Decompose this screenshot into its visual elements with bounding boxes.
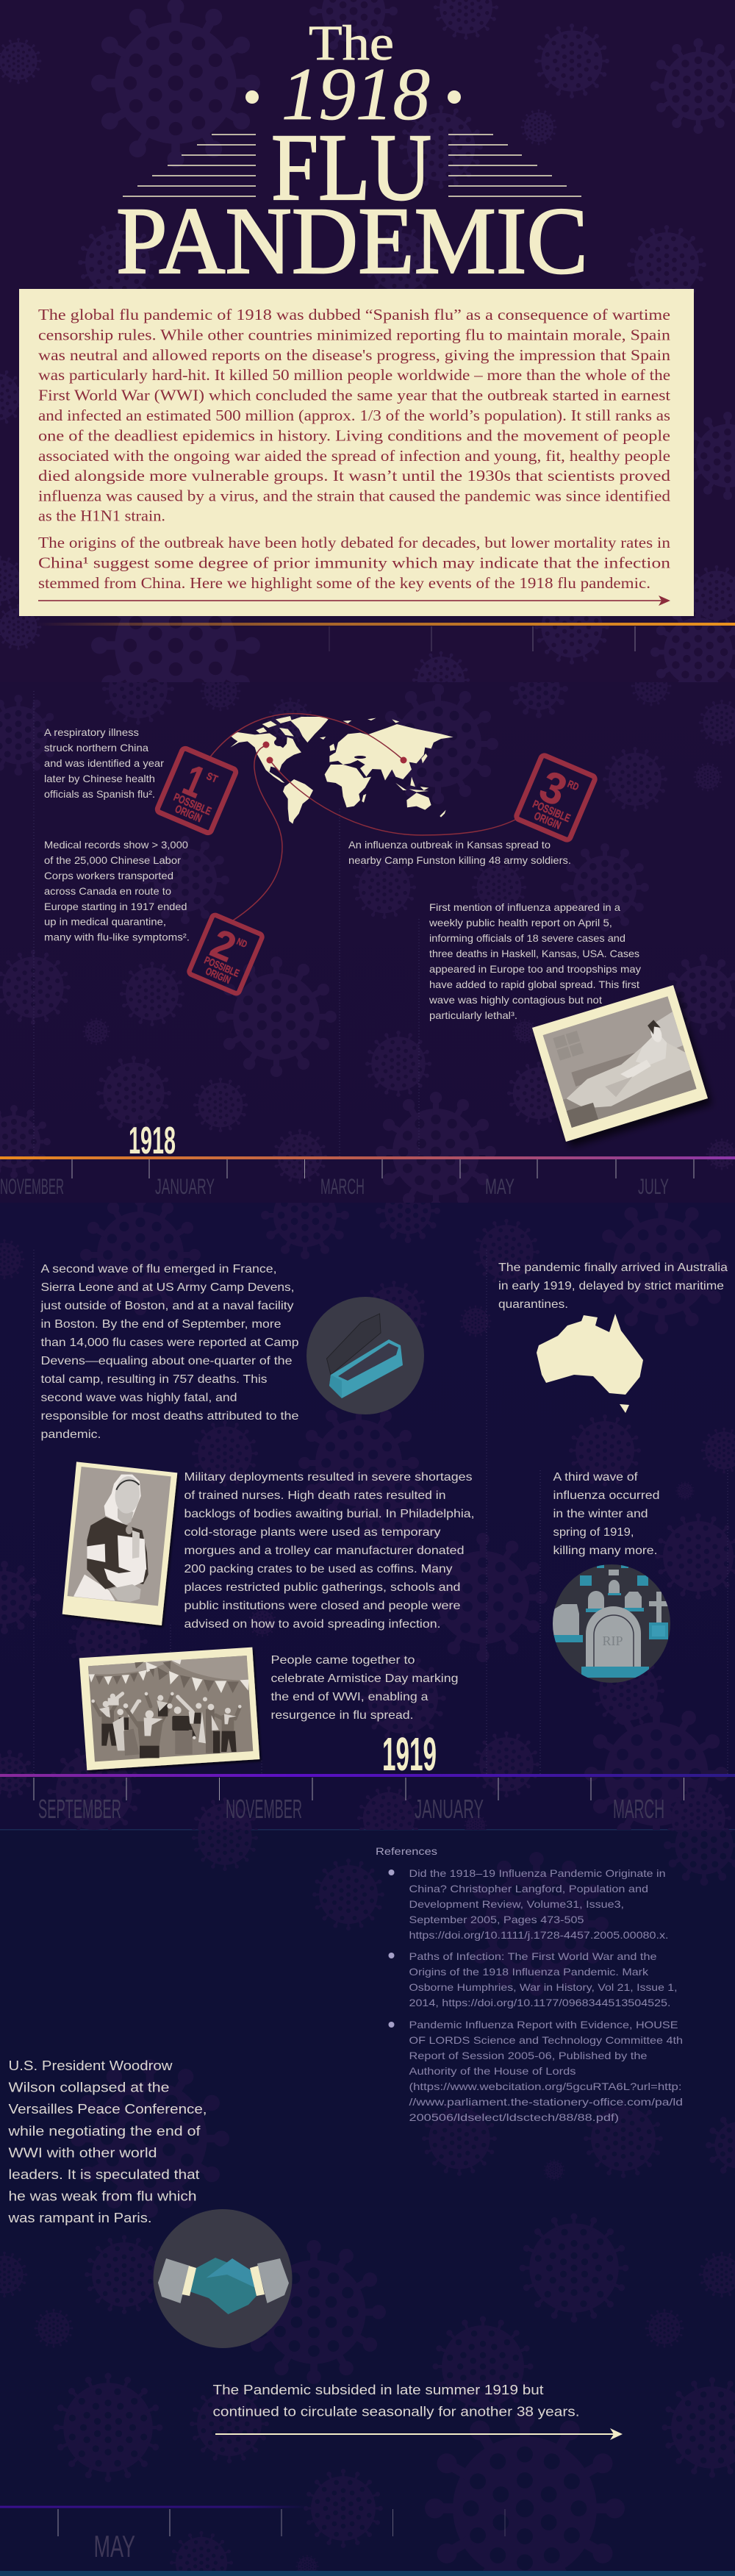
text block: Chinese Labor Corps: up in medical quarantine, xyxy=(44,916,166,928)
text block: military deployments: 200 packing crates to be used as coffins. Many xyxy=(184,1563,453,1575)
text block: military deployments: places restricted public gatherings, schools and xyxy=(184,1581,460,1594)
reference 2: 2014, https://doi.org/10.1177/0968344513504525. xyxy=(409,1997,670,2008)
text block: respiratory illness in China: later by Chinese health xyxy=(44,773,155,784)
connector curves and origin markers xyxy=(209,714,515,920)
text block: second wave: responsible for most deaths attributed to the xyxy=(41,1410,299,1423)
badge: 3rd possible origin: 3 xyxy=(533,761,574,815)
reference 2: Paths of Infection: The First World War and the xyxy=(409,1950,657,1962)
text block: first mention of influenza: appeared in Europe too and troopships may xyxy=(429,963,641,975)
text block: third wave: in the winter and xyxy=(553,1508,648,1520)
text block: introduction paragraph 1: was particularly hard-hit. It killed 50 million people worldwide – more than the whole of the xyxy=(38,366,670,384)
icon: Australia map xyxy=(537,1314,643,1413)
reference 1: Development Review, Volume31, Issue3, xyxy=(409,1898,624,1910)
reference 3: Pandemic Influenza Report with Evidence, HOUSE xyxy=(409,2019,678,2031)
text block: second wave: than 14,000 flu cases were reported at Camp xyxy=(41,1337,299,1349)
text block: introduction paragraph 2 xyxy=(38,534,671,592)
text block: Woodrow Wilson: was rampant in Paris. xyxy=(7,2211,151,2225)
reference 3: OF LORDS Science and Technology Committee 4th xyxy=(409,2034,683,2046)
badge: 1st possible origin: 1 xyxy=(176,755,212,807)
text block: Chinese Labor Corps: Corps workers transported xyxy=(44,870,173,881)
text block: Chinese Labor Corps: across Canada en route to xyxy=(44,885,171,897)
text block: third wave: killing many more. xyxy=(553,1545,657,1557)
text block: second wave: Devens—equaling about one-quarter of the xyxy=(41,1355,293,1367)
reference 1: Did the 1918–19 Influenza Pandemic Originate in xyxy=(409,1867,666,1879)
month labels: row 2: JANUARY xyxy=(415,1794,484,1824)
text block: introduction paragraph 1: censorship rules. While other countries minimized reporting flu to maintain morale, Spain xyxy=(38,326,671,343)
month labels: row 2: MARCH xyxy=(613,1794,664,1824)
text block: pandemic subsided: continued to circulate seasonally for another 38 years. xyxy=(213,2404,579,2419)
timeline line 3 xyxy=(0,1774,735,1800)
photo: patient in bed xyxy=(532,985,708,1142)
text block: respiratory illness in China: and was identified a year xyxy=(44,757,164,769)
text block: Australia: in early 1919, delayed by strict maritime xyxy=(498,1280,724,1292)
text block: introduction paragraph 1: The global flu pandemic of 1918 was dubbed “Spanish flu” as a consequence of wartime xyxy=(38,306,670,323)
text block: first mention of influenza: particularly lethal³. xyxy=(429,1009,517,1021)
text block: third wave: spring of 1919, xyxy=(553,1526,634,1539)
text block: introduction paragraph 2: stemmed from China. Here we highlight some of the key events of the 1918 flu pandemic. xyxy=(38,574,650,592)
timeline line 4 xyxy=(0,2505,505,2536)
text block: Woodrow Wilson: U.S. President Woodrow xyxy=(9,2058,173,2073)
year label: 1918: 1918 xyxy=(129,1120,176,1162)
text block: Australia: quarantines. xyxy=(498,1298,568,1311)
month labels: row 1: MARCH xyxy=(320,1175,365,1199)
badge: 3rd possible origin: ORIGIN xyxy=(532,809,563,832)
text block: Australia xyxy=(498,1262,728,1311)
text block: Woodrow Wilson: while negotiating the end of xyxy=(7,2124,201,2139)
badge: 3rd possible origin: RD xyxy=(566,778,581,793)
text block: second wave: total camp, resulting in 757 deaths. This xyxy=(41,1373,268,1386)
month label: row 3: MAY xyxy=(94,2529,135,2564)
text block: Armistice Day: resurgence in flu spread. xyxy=(270,1709,413,1722)
text block: Woodrow Wilson: Wilson collapsed at the xyxy=(9,2081,170,2095)
text block: introduction paragraph 1: as the H1N1 strain. xyxy=(38,507,165,525)
text block: respiratory illness in China xyxy=(44,726,164,800)
month labels: row 1 xyxy=(0,1175,669,1199)
arrow: pandemic continues xyxy=(215,2428,623,2440)
text block: first mention of influenza: informing officials of 18 severe cases and xyxy=(429,932,625,944)
reference 3: 200506/ldselect/ldsctech/88/88.pdf) xyxy=(409,2111,619,2123)
text block: introduction paragraph 1: First World War (WWI) which concluded the same year that the outbreak started in earnest xyxy=(38,387,670,404)
text block: Woodrow Wilson: Versailles Peace Conference, xyxy=(9,2102,207,2117)
month labels: row 1: MAY xyxy=(485,1175,514,1199)
text block: second wave: A second wave of flu emerged in France, xyxy=(41,1263,276,1276)
title: PANDEMIC xyxy=(116,188,588,294)
title: 1918 xyxy=(282,53,430,136)
text block: second wave xyxy=(40,1263,299,1441)
reference 3: Authority of the House of Lords xyxy=(409,2065,576,2077)
badge: 2nd possible origin xyxy=(188,914,263,995)
badge: 1st possible origin: ORIGIN xyxy=(173,803,204,825)
references xyxy=(376,1845,683,2123)
arrow: introduction card xyxy=(38,595,670,606)
text block: Armistice Day: celebrate Armistice Day marking xyxy=(270,1672,459,1685)
text block: pandemic subsided: The Pandemic subsided in late summer 1919 but xyxy=(213,2383,544,2397)
text block: Woodrow Wilson: WWI with other world xyxy=(9,2145,157,2160)
text block: introduction paragraph 1: one of the deadliest epidemics in history. Living conditions and the movement of people xyxy=(38,426,670,444)
icon: handshake xyxy=(153,2209,293,2348)
timeline line 2 xyxy=(0,1156,735,1178)
text block: Chinese Labor Corps: of the 25,000 Chinese Labor xyxy=(44,854,181,866)
text block: Woodrow Wilson: leaders. It is speculated that xyxy=(9,2167,200,2182)
text block: introduction paragraph 1: and infected an estimated 500 million (approx. 1/3 of the world’s population). It still ranks as xyxy=(38,407,670,424)
text block: military deployments: public institutions were closed and people were xyxy=(184,1600,461,1612)
text block: Armistice Day xyxy=(270,1654,459,1722)
month labels: row 1: JANUARY xyxy=(155,1175,215,1199)
text block: third wave: A third wave of xyxy=(553,1471,638,1484)
text block: military deployments: advised on how to avoid spreading infection. xyxy=(184,1618,441,1631)
badge: 1st possible origin: POSSIBLE xyxy=(172,791,213,818)
text block: Kansas outbreak xyxy=(348,839,571,866)
text block: first mention of influenza: First mention of influenza appeared in a xyxy=(429,901,620,913)
month labels: row 2: NOVEMBER xyxy=(226,1794,302,1824)
photo: nurse xyxy=(62,1461,177,1625)
world map xyxy=(230,716,453,824)
text block: introduction paragraph 1 xyxy=(38,306,671,525)
text block: Chinese Labor Corps: Medical records show > 3,000 xyxy=(44,839,188,851)
text block: introduction paragraph 2: The origins of the outbreak have been hotly debated for decades, but lower mortality rates in xyxy=(38,534,671,551)
icon: coffin xyxy=(306,1297,424,1414)
text block: second wave: pandemic. xyxy=(41,1428,101,1441)
text block: second wave: in Boston. By the end of September, more xyxy=(41,1318,282,1331)
month labels: row 1: NOVEMBER xyxy=(0,1175,64,1199)
month labels: row 1: JULY xyxy=(638,1175,669,1199)
badge: 3rd possible origin: POSSIBLE xyxy=(531,798,572,825)
icon: graveyard: RIP xyxy=(602,1634,623,1648)
reference 2 xyxy=(388,1950,678,2008)
text block: introduction paragraph 1: died alongside more vulnerable groups. It wasn’t until the 1930s that scientists proved xyxy=(38,467,671,484)
panel: introduction card xyxy=(19,289,694,616)
text block: respiratory illness in China: officials as Spanish flu². xyxy=(44,788,155,800)
text block: Armistice Day: People came together to xyxy=(270,1654,415,1667)
text block: military deployments: backlogs of bodies awaiting burial. In Philadelphia, xyxy=(184,1508,475,1520)
text block: first mention of influenza xyxy=(429,901,641,1021)
text block: military deployments: of trained nurses. High death rates resulted in xyxy=(184,1489,445,1502)
reference 2: Origins of the 1918 Influenza Pandemic. Mark xyxy=(409,1966,649,1978)
text block: second wave: just outside of Boston, and at a naval facility xyxy=(40,1300,294,1312)
month labels: row 2: SEPTEMBER xyxy=(38,1794,121,1824)
reference 3: (https://www.webcitation.org/5gcuRTA6L?url=http: xyxy=(409,2081,682,2092)
text block: second wave: Sierra Leone and at US Army Camp Devens, xyxy=(41,1281,294,1294)
text block: respiratory illness in China: A respiratory illness xyxy=(44,726,139,738)
reference 1 xyxy=(388,1867,669,1941)
text block: Chinese Labor Corps xyxy=(44,839,190,942)
text block: Kansas outbreak: nearby Camp Funston killing 48 army soldiers. xyxy=(348,854,571,866)
title xyxy=(116,15,588,294)
badge: 2nd possible origin: ND xyxy=(235,936,249,950)
badge: 1st possible origin xyxy=(157,748,237,834)
photo: Armistice Day celebration xyxy=(79,1647,259,1770)
reference 3: //www.parliament.the-stationery-office.com/pa/ld xyxy=(409,2096,683,2108)
title: FLU xyxy=(271,115,431,221)
text block: Australia: The pandemic finally arrived in Australia xyxy=(498,1262,728,1274)
text block: Armistice Day: the end of WWI, enabling a xyxy=(270,1691,429,1703)
timeline line 1 xyxy=(0,623,735,651)
badge: 2nd possible origin: POSSIBLE xyxy=(203,954,241,979)
text block: pandemic subsided xyxy=(213,2383,579,2419)
text block: military deployments: Military deployments resulted in severe shortages xyxy=(184,1471,472,1484)
reference 3: Report of Session 2005-06, Published by the xyxy=(409,2050,648,2061)
text block: Chinese Labor Corps: many with flu-like symptoms². xyxy=(44,931,190,942)
text block: introduction paragraph 2: China¹ suggest some degree of prior immunity which may indicate that the infection xyxy=(38,554,671,571)
title: The xyxy=(309,15,394,71)
year label: 1919: 1919 xyxy=(382,1728,437,1781)
badge: 1st possible origin: ST xyxy=(205,770,220,785)
text block: first mention of influenza: wave was highly contagious but not xyxy=(429,994,602,1006)
references heading: References xyxy=(376,1845,437,1857)
text block: military deployments: morgues and a trolley car manufacturer donated xyxy=(184,1545,465,1557)
reference 1: China? Christopher Langford, Population and xyxy=(409,1883,648,1895)
reference 3 xyxy=(388,2019,683,2123)
badge: 3rd possible origin xyxy=(515,754,596,841)
text block: first mention of influenza: three deaths in Haskell, Kansas, USA. Cases xyxy=(429,948,639,959)
reference 2: Osborne Humphries, War in History, Vol 21, Issue 1, xyxy=(409,1981,678,1993)
badge: 2nd possible origin: 2 xyxy=(204,920,243,971)
text block: introduction paragraph 1: associated with the ongoing war aided the spread of infection and young, fit, healthy people xyxy=(38,447,670,465)
badge: 2nd possible origin: ORIGIN xyxy=(204,965,232,986)
text block: introduction paragraph 1: influenza was caused by a virus, and the strain that caused the pandemic was since identified xyxy=(38,487,671,505)
text block: third wave xyxy=(553,1471,660,1557)
text block: military deployments: cold-storage plants were used as temporary xyxy=(184,1526,441,1539)
month labels: row 2 xyxy=(38,1794,664,1824)
text block: Woodrow Wilson xyxy=(7,2058,207,2225)
text block: second wave: second wave was highly fatal, and xyxy=(41,1392,237,1404)
icon: graveyard xyxy=(553,1564,670,1683)
text block: first mention of influenza: weekly public health report on April 5, xyxy=(429,917,612,929)
text block: introduction paragraph 1: was neutral and allowed reports on the disease's progress, giving the impression that Spain xyxy=(38,346,671,364)
text block: Chinese Labor Corps: Europe starting in 1917 ended xyxy=(44,901,187,912)
text block: respiratory illness in China: struck northern China xyxy=(44,742,148,754)
text block: military deployments xyxy=(184,1471,475,1631)
reference 1: September 2005, Pages 473-505 xyxy=(409,1914,584,1925)
text block: Kansas outbreak: An influenza outbreak in Kansas spread to xyxy=(348,839,551,851)
reference 1: https://doi.org/10.1111/j.1728-4457.2005.00080.x. xyxy=(409,1929,669,1941)
text block: first mention of influenza: have added to rapid global spread. This first xyxy=(429,978,639,990)
text block: third wave: influenza occurred xyxy=(553,1489,660,1502)
text block: Woodrow Wilson: he was weak from flu which xyxy=(9,2189,197,2204)
